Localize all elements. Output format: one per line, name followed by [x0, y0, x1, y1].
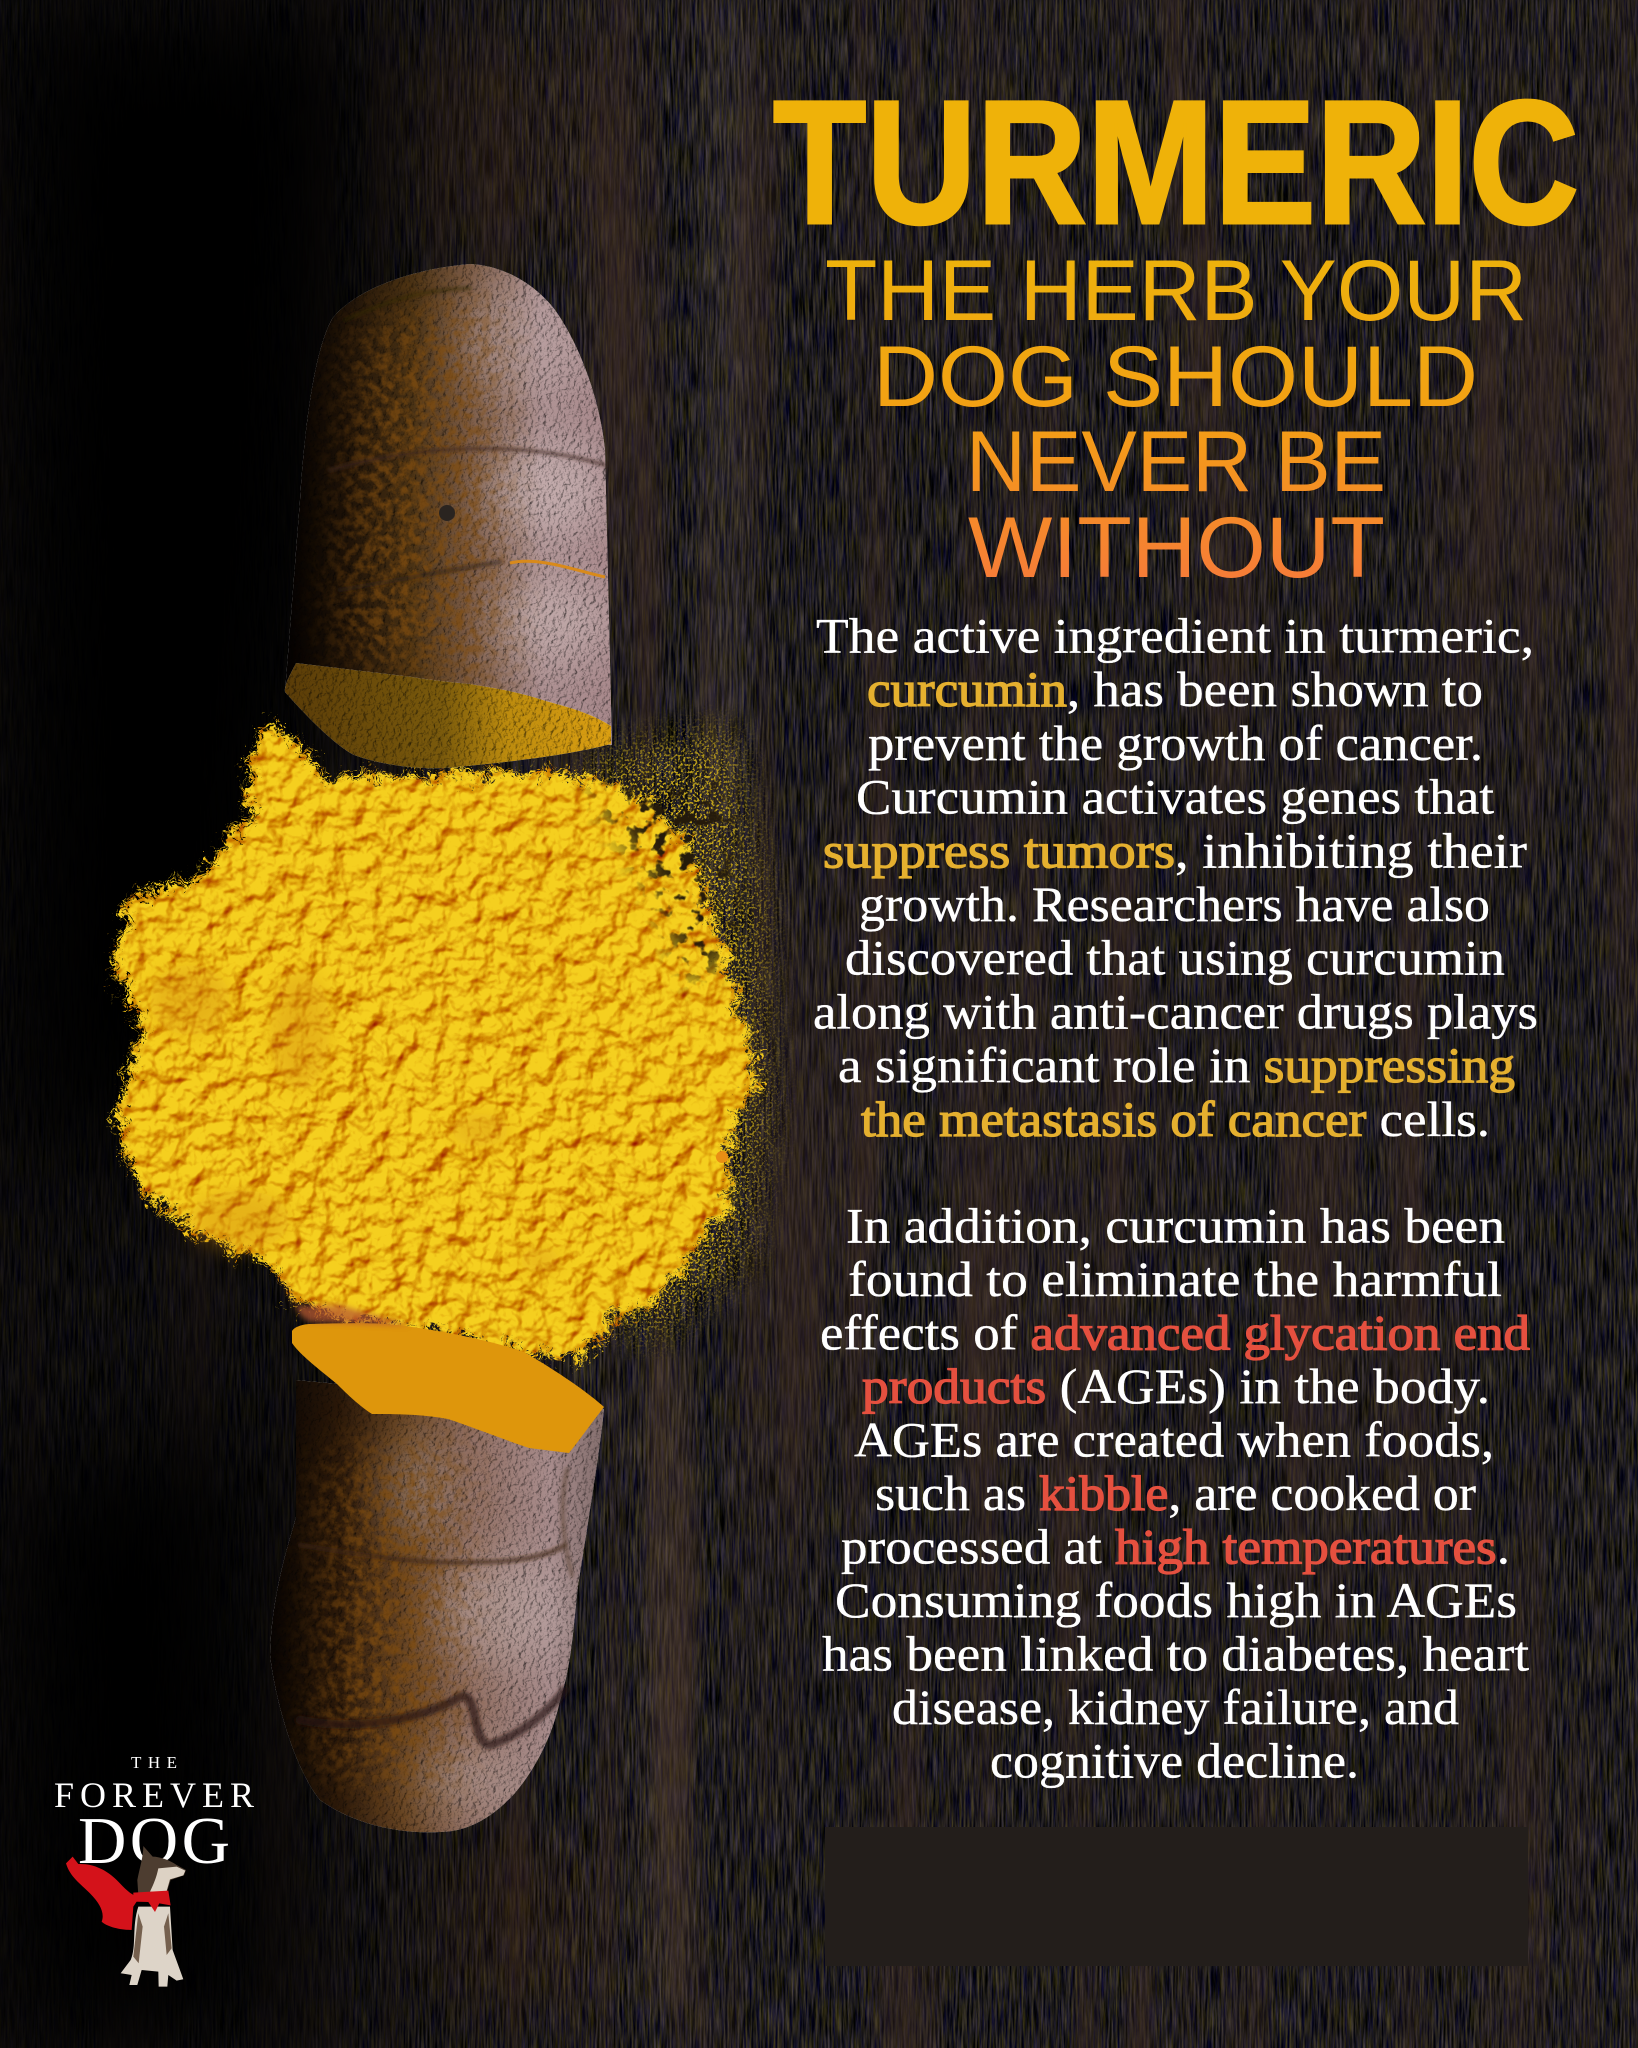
- logo: The Forever Dog: DOG: [78, 1804, 230, 1878]
- subtitle: NEVER BE: [966, 414, 1386, 510]
- paragraph: advanced glycation end products: has been linked to diabetes, heart: [822, 1626, 1529, 1682]
- powder shadow patches: [150, 965, 562, 1272]
- subtitle: WITHOUT: [968, 500, 1385, 596]
- logo: The Forever Dog: THE: [131, 1753, 177, 1772]
- subtitle: [825, 243, 1527, 596]
- icon: dog in red cape: [66, 1846, 186, 1987]
- orange dust on root: [340, 290, 500, 690]
- orange dust on root: [320, 1440, 460, 1800]
- logo: The Forever Dog: FOREVER: [54, 1775, 254, 1815]
- paragraph: advanced glycation end products: disease, kidney failure, and: [892, 1679, 1459, 1735]
- paragraph: curcumin and cancer: discovered that using curcumin: [845, 930, 1505, 986]
- paragraph: curcumin and cancer: suppress tumors , inhibiting their: [823, 822, 1527, 878]
- logo: The Forever Dog: [54, 1753, 254, 1987]
- paragraph: curcumin and cancer: The active ingredient in turmeric,: [816, 608, 1534, 664]
- paragraph: curcumin and cancer: Curcumin activates genes that: [856, 769, 1494, 825]
- orange root crack: [510, 561, 605, 577]
- paragraph: curcumin and cancer: along with anti-cancer drugs plays: [813, 983, 1538, 1039]
- paragraph: advanced glycation end products: processed at high temperatures .: [841, 1519, 1510, 1575]
- paragraph: curcumin and cancer: [813, 608, 1538, 1147]
- turmeric powder pile: [112, 722, 760, 1362]
- bottom cut face: [292, 1323, 604, 1453]
- paragraph: curcumin and cancer: curcumin, has been shown to: [867, 661, 1483, 717]
- root pore: [439, 505, 455, 521]
- subtitle: DOG SHOULD: [873, 329, 1478, 425]
- paragraph: advanced glycation end products: [820, 1198, 1530, 1789]
- paragraph: curcumin and cancer: a significant role in suppressing: [838, 1037, 1515, 1093]
- paragraph: curcumin and cancer: the metastasis of cancer cells.: [861, 1091, 1490, 1147]
- top turmeric root: [285, 260, 615, 768]
- paragraph: curcumin and cancer: prevent the growth of cancer.: [868, 715, 1483, 771]
- paragraph: advanced glycation end products: cognitive decline.: [990, 1733, 1359, 1789]
- paragraph: curcumin and cancer: growth. Researchers have also: [859, 876, 1490, 932]
- dark gaps at powder edge: [590, 780, 735, 985]
- root creases: [300, 1470, 572, 1745]
- subtitle: THE HERB YOUR: [825, 243, 1527, 339]
- scattered turmeric dust: [590, 730, 765, 1340]
- root creases: [330, 288, 605, 590]
- orange powder fleck: [716, 1151, 728, 1163]
- bottom turmeric root: [265, 1270, 610, 1835]
- top cut face: [285, 663, 611, 768]
- pink skin above cut: [280, 1270, 410, 1326]
- paragraph: advanced glycation end products: products (AGEs) in the body.: [862, 1358, 1490, 1414]
- paragraph: advanced glycation end products: AGEs are created when foods,: [854, 1412, 1494, 1468]
- paragraph: advanced glycation end products: Consuming foods high in AGEs: [835, 1572, 1517, 1628]
- paragraph: advanced glycation end products: found to eliminate the harmful: [848, 1251, 1502, 1307]
- blank dark panel: [825, 1827, 1528, 1966]
- paragraph: advanced glycation end products: In addition, curcumin has been: [846, 1198, 1505, 1254]
- paragraph: advanced glycation end products: effects of advanced glycation end: [820, 1305, 1530, 1361]
- paragraph: advanced glycation end products: such as kibble, are cooked or: [875, 1465, 1476, 1521]
